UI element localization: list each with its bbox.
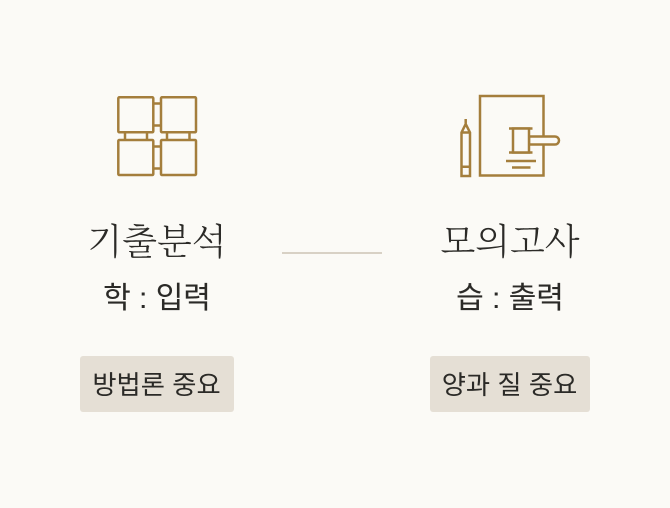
tag: left column: 방법론 중요 — [92, 370, 221, 400]
tag: right column — [430, 356, 590, 412]
heading: right column: 모의고사 — [440, 222, 580, 262]
divider line between columns — [282, 252, 382, 254]
tag: right column: 양과 질 중요 — [442, 370, 577, 400]
subheading: left column: 학 : 입력 — [103, 282, 211, 315]
subheading: right column: 습 : 출력 — [456, 282, 564, 315]
heading: left column: 기출분석 — [87, 222, 227, 262]
tag: left column — [80, 356, 234, 412]
icon: grid of four connected squares — [117, 96, 198, 176]
icon: document with gavel and pencil — [460, 94, 560, 178]
